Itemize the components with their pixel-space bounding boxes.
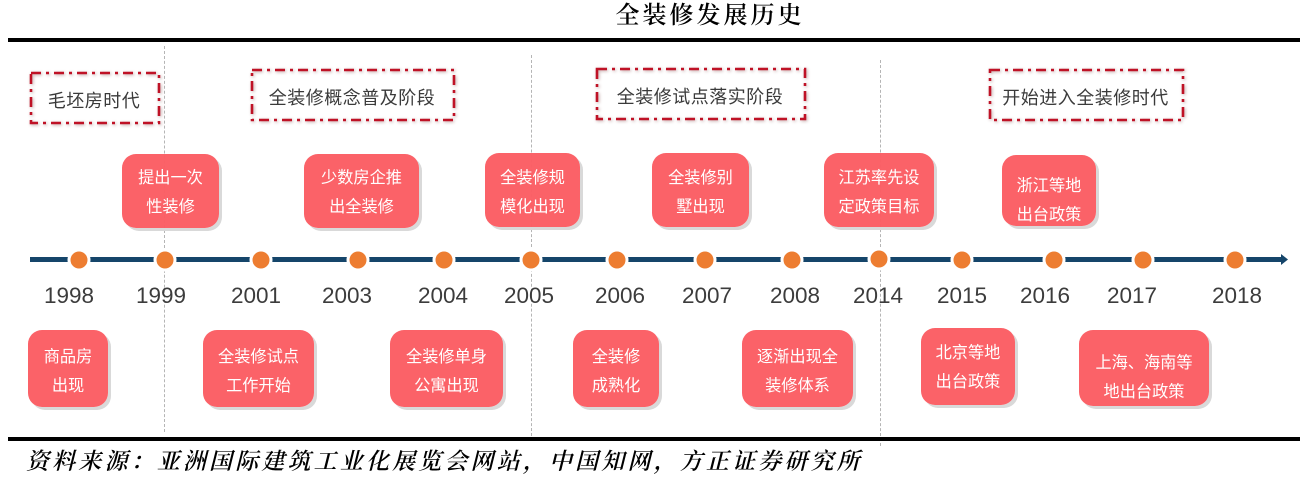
event card: 2015 bbox=[921, 328, 1015, 405]
event card: 2004: 全装修单身 bbox=[406, 348, 487, 366]
year labels: 1999 bbox=[136, 283, 186, 308]
event card: 2016: 出台政策 bbox=[1017, 206, 1081, 224]
event card: 2008: 逐渐出现全 bbox=[757, 348, 838, 366]
event card: 1999: 提出一次 bbox=[138, 169, 203, 187]
year labels: 2007 bbox=[682, 283, 732, 308]
year labels: 2016 bbox=[1020, 283, 1070, 308]
event card: 2017 bbox=[1079, 330, 1209, 406]
event card: 2016: 浙江等地 bbox=[1017, 177, 1081, 195]
year labels: 2018 bbox=[1212, 283, 1262, 308]
stage label: full decoration era: 开始进入全装修时代 bbox=[1002, 88, 1169, 108]
event card: 2001: 工作开始 bbox=[226, 377, 291, 395]
stage label: pilot implementation: 全装修试点落实阶段 bbox=[617, 86, 783, 106]
stage label: concept popularisation: 全装修概念普及阶段 bbox=[269, 88, 435, 108]
event card: 2007: 全装修别 bbox=[668, 169, 733, 187]
event card: 2014 bbox=[824, 153, 934, 227]
event card: 2017: 上海、海南等 bbox=[1095, 354, 1193, 372]
event card: 2007 bbox=[652, 153, 749, 227]
stage label: rough house era bbox=[28, 70, 164, 128]
event card: 2016 bbox=[1002, 155, 1096, 226]
stage label: pilot implementation bbox=[594, 66, 810, 124]
year labels: 2005 bbox=[504, 283, 554, 308]
event card: 2005: 全装修规 bbox=[500, 169, 565, 187]
stage label: concept popularisation bbox=[250, 68, 458, 124]
event card: 2006 bbox=[573, 330, 659, 407]
year labels: 1998 bbox=[44, 283, 94, 308]
event card: 2004 bbox=[390, 330, 503, 407]
event card: 2004: 公寓出现 bbox=[414, 377, 479, 395]
event card: 2006: 成熟化 bbox=[592, 377, 640, 395]
event card: 1999 bbox=[122, 154, 219, 228]
timeline axis with markers bbox=[30, 249, 1288, 272]
event card: 2014: 定政策目标 bbox=[839, 198, 919, 216]
event card: 2005 bbox=[485, 153, 580, 227]
year labels: 2004 bbox=[418, 283, 468, 308]
year labels: 2014 bbox=[853, 283, 903, 308]
event card: 2006: 全装修 bbox=[592, 348, 640, 366]
event card: 2007: 墅出现 bbox=[676, 198, 725, 216]
event card: 2017: 地出台政策 bbox=[1104, 383, 1184, 401]
event card: 2008: 装修体系 bbox=[765, 377, 830, 395]
event card: 2008 bbox=[742, 330, 853, 407]
event card: 2014: 江苏率先设 bbox=[839, 169, 919, 187]
event card: 2005: 模化出现 bbox=[500, 198, 565, 216]
year labels: 2006 bbox=[595, 283, 645, 308]
event card: 1998 bbox=[28, 330, 108, 407]
event card: 2003 bbox=[304, 154, 419, 228]
stage label: rough house era: 毛坯房时代 bbox=[48, 90, 140, 110]
event card: 1999: 性装修 bbox=[146, 198, 195, 216]
event card: 2003: 出全装修 bbox=[329, 198, 394, 216]
source note: 资料来源：亚洲国际建筑工业化展览会网站，中国知网，方正证券研究所 bbox=[26, 449, 863, 474]
event card: 2001 bbox=[203, 330, 314, 407]
year labels: 2017 bbox=[1107, 283, 1157, 308]
year labels: 2015 bbox=[937, 283, 987, 308]
event card: 1998: 商品房 bbox=[44, 348, 92, 366]
title: 全装修发展历史 bbox=[616, 3, 804, 29]
year labels: 2008 bbox=[770, 283, 820, 308]
event card: 2015: 北京等地 bbox=[936, 344, 1000, 362]
event card: 2001: 全装修试点 bbox=[218, 348, 299, 366]
year labels: 2003 bbox=[322, 283, 372, 308]
event card: 2015: 出台政策 bbox=[936, 373, 1000, 391]
stage label: full decoration era bbox=[988, 68, 1188, 124]
event card: 1998: 出现 bbox=[52, 377, 84, 395]
year labels: 2001 bbox=[231, 283, 281, 308]
event card: 2003: 少数房企推 bbox=[321, 169, 402, 187]
